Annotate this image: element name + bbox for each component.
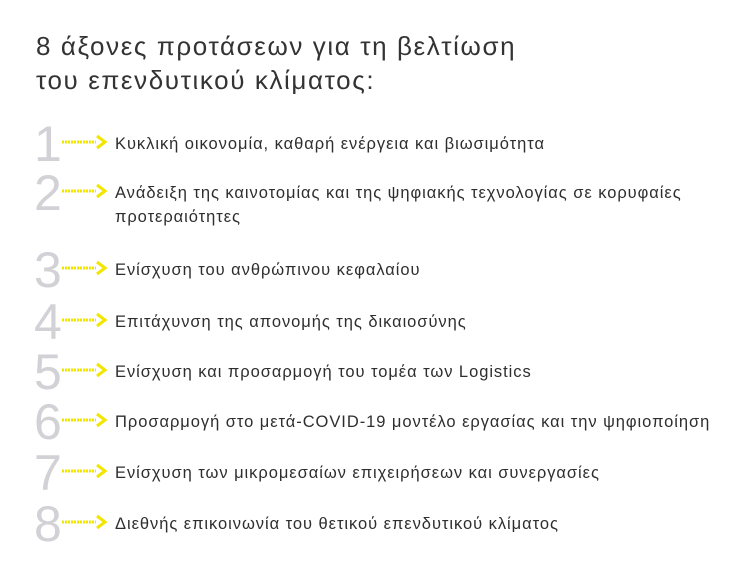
item 3: 3 [34,242,62,298]
item 2: 2 [34,165,62,221]
item 3 [34,242,420,298]
item 7 [34,445,600,501]
item 4: Επιτάχυνση της απονομής της δικαιοσύνης [115,313,467,331]
item 6 [34,394,710,450]
item 5: Ενίσχυση και προσαρμογή του τομέα των Logistics [115,363,532,381]
item 7: 7 [34,445,62,501]
item 5: 5 [34,344,62,400]
item 2: Ανάδειξη της καινοτομίας και της ψηφιακής τεχνολογίας σε κορυφαίες [115,184,682,202]
item 4 [34,294,467,350]
item 5 [34,344,532,400]
item 1 [34,116,545,172]
title: 8 άξονες προτάσεων για τη βελτίωση [36,31,516,61]
item 2: προτεραιότητες [115,208,241,226]
item 2 [34,165,682,226]
title: του επενδυτικού κλίματος: [36,65,375,95]
item 8 [34,496,559,552]
item 6: Προσαρμογή στο μετά-COVID-19 μοντέλο εργασίας και την ψηφιοποίηση [115,413,710,431]
item 3: Ενίσχυση του ανθρώπινου κεφαλαίου [115,261,420,279]
item 1: 1 [34,116,62,172]
item 1: Κυκλική οικονομία, καθαρή ενέργεια και βιωσιμότητα [115,135,545,153]
item 8: 8 [34,496,62,552]
item 6: 6 [34,394,62,450]
item 8: Διεθνής επικοινωνία του θετικού επενδυτικού κλίματος [115,515,559,533]
item 7: Ενίσχυση των μικρομεσαίων επιχειρήσεων και συνεργασίες [115,464,600,482]
item 4: 4 [34,294,62,350]
title [36,31,516,95]
